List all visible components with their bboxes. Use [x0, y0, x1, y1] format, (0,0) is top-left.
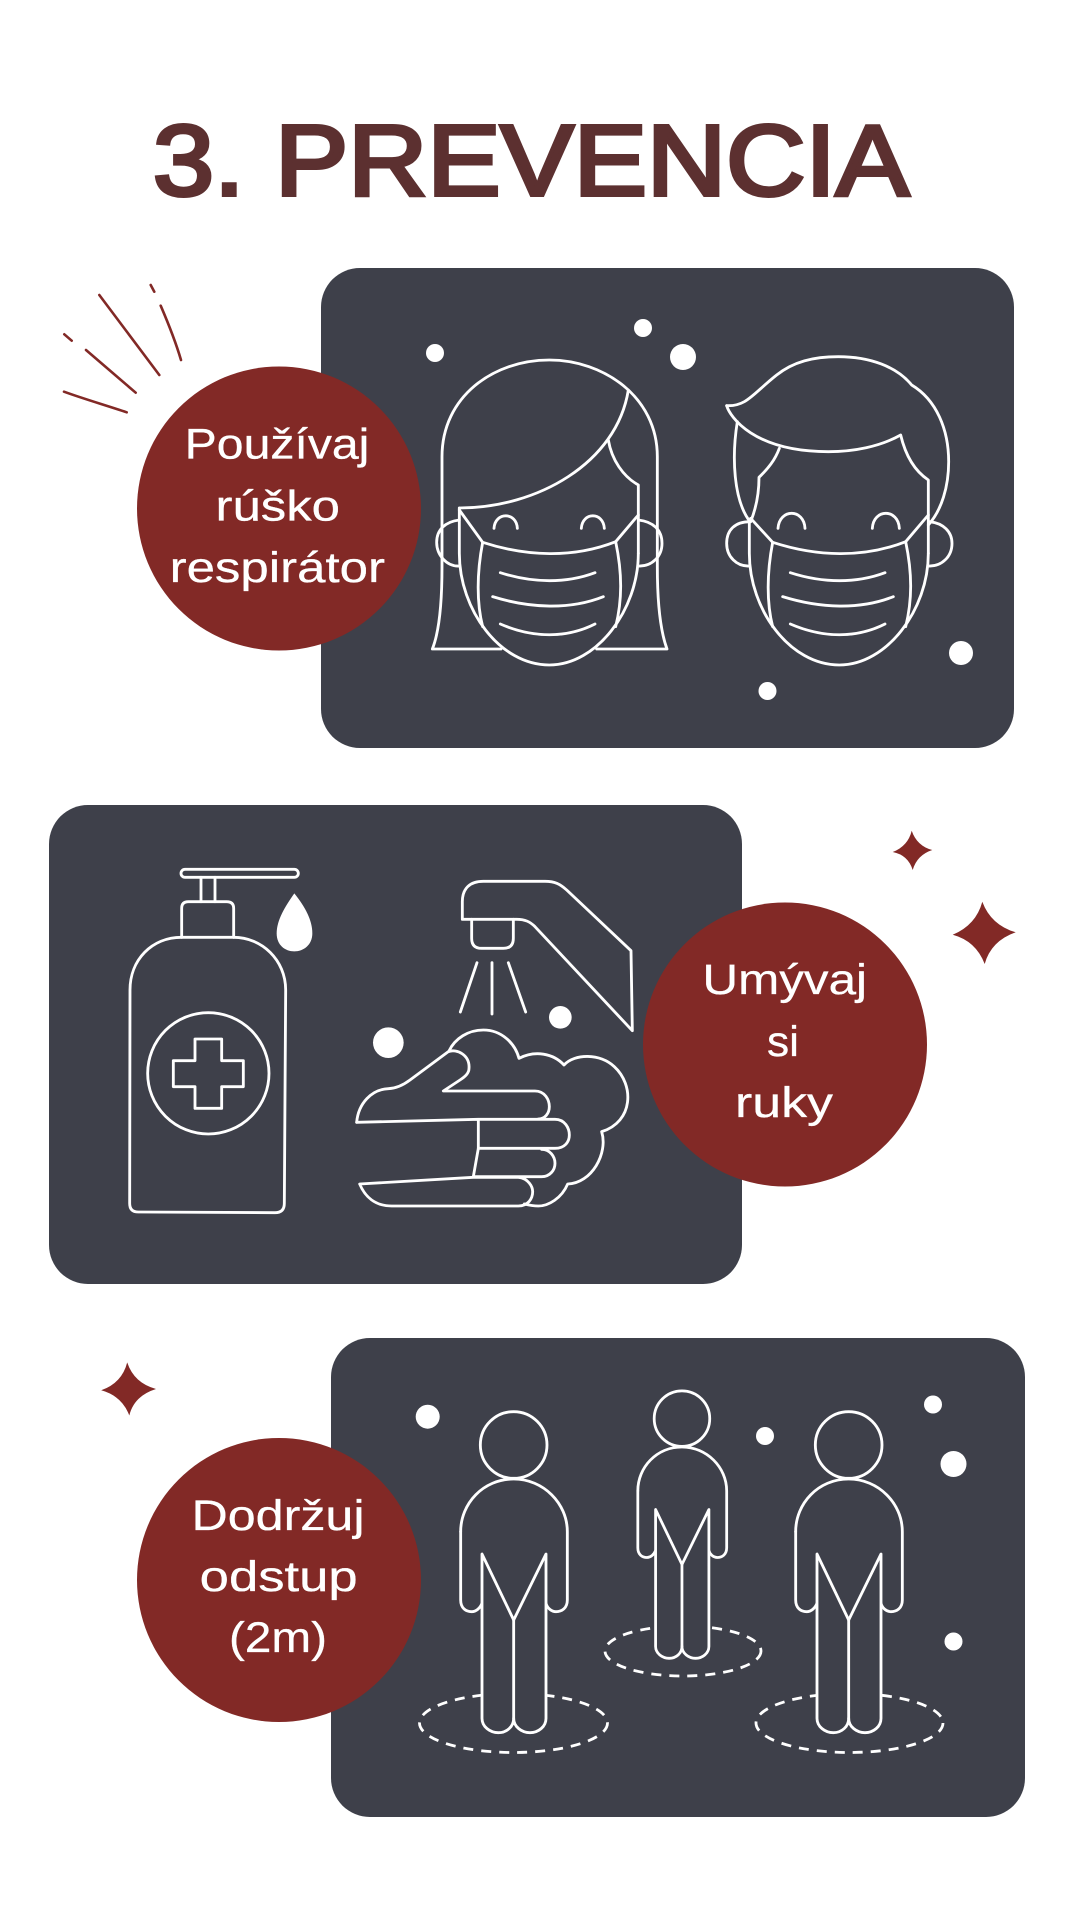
circle background [137, 1438, 421, 1722]
dashed circle: right [756, 1694, 943, 1752]
panel background: masks [321, 268, 1014, 748]
circle label: keep distance [137, 1438, 421, 1722]
icon: sparkles [893, 831, 1016, 964]
label text: ruky [735, 1079, 834, 1127]
label text: odstup [200, 1553, 358, 1601]
circle background [137, 366, 421, 650]
circle background [643, 902, 927, 1186]
icon: person left [461, 1412, 567, 1733]
icon: burst rays [64, 285, 181, 412]
label text: Umývaj [702, 956, 867, 1004]
panel: hand washing [49, 805, 742, 1284]
title: 3. PREVENCIA [153, 105, 909, 217]
icon: woman with mask [432, 360, 667, 665]
icon: person middle [638, 1391, 727, 1658]
circle label: wash hands [643, 902, 927, 1186]
label text: (2m) [229, 1614, 327, 1662]
label text: si [767, 1018, 799, 1066]
panel: masks [321, 268, 1014, 748]
icon: person right [796, 1412, 902, 1733]
label text: Používaj [185, 420, 369, 468]
label text [702, 956, 867, 1127]
icon: sanitizer bottle [130, 869, 312, 1213]
label text: rúško [216, 482, 340, 530]
dashed circle: left [420, 1694, 608, 1752]
label text [170, 420, 385, 592]
label text: respirátor [170, 544, 385, 592]
label text [192, 1492, 364, 1662]
icon: sparkle [101, 1362, 156, 1416]
circle label: use a mask [137, 366, 421, 650]
panel background: distancing [331, 1338, 1025, 1817]
label text: Dodržuj [192, 1492, 364, 1540]
panel background: hand washing [49, 805, 742, 1284]
icon: tap and washing hands [357, 881, 632, 1206]
icon: man with mask [727, 357, 952, 665]
panel: distancing [331, 1338, 1025, 1817]
decorative dots [416, 1396, 966, 1650]
dashed circle: middle [605, 1626, 761, 1676]
decorative dots [426, 319, 973, 700]
